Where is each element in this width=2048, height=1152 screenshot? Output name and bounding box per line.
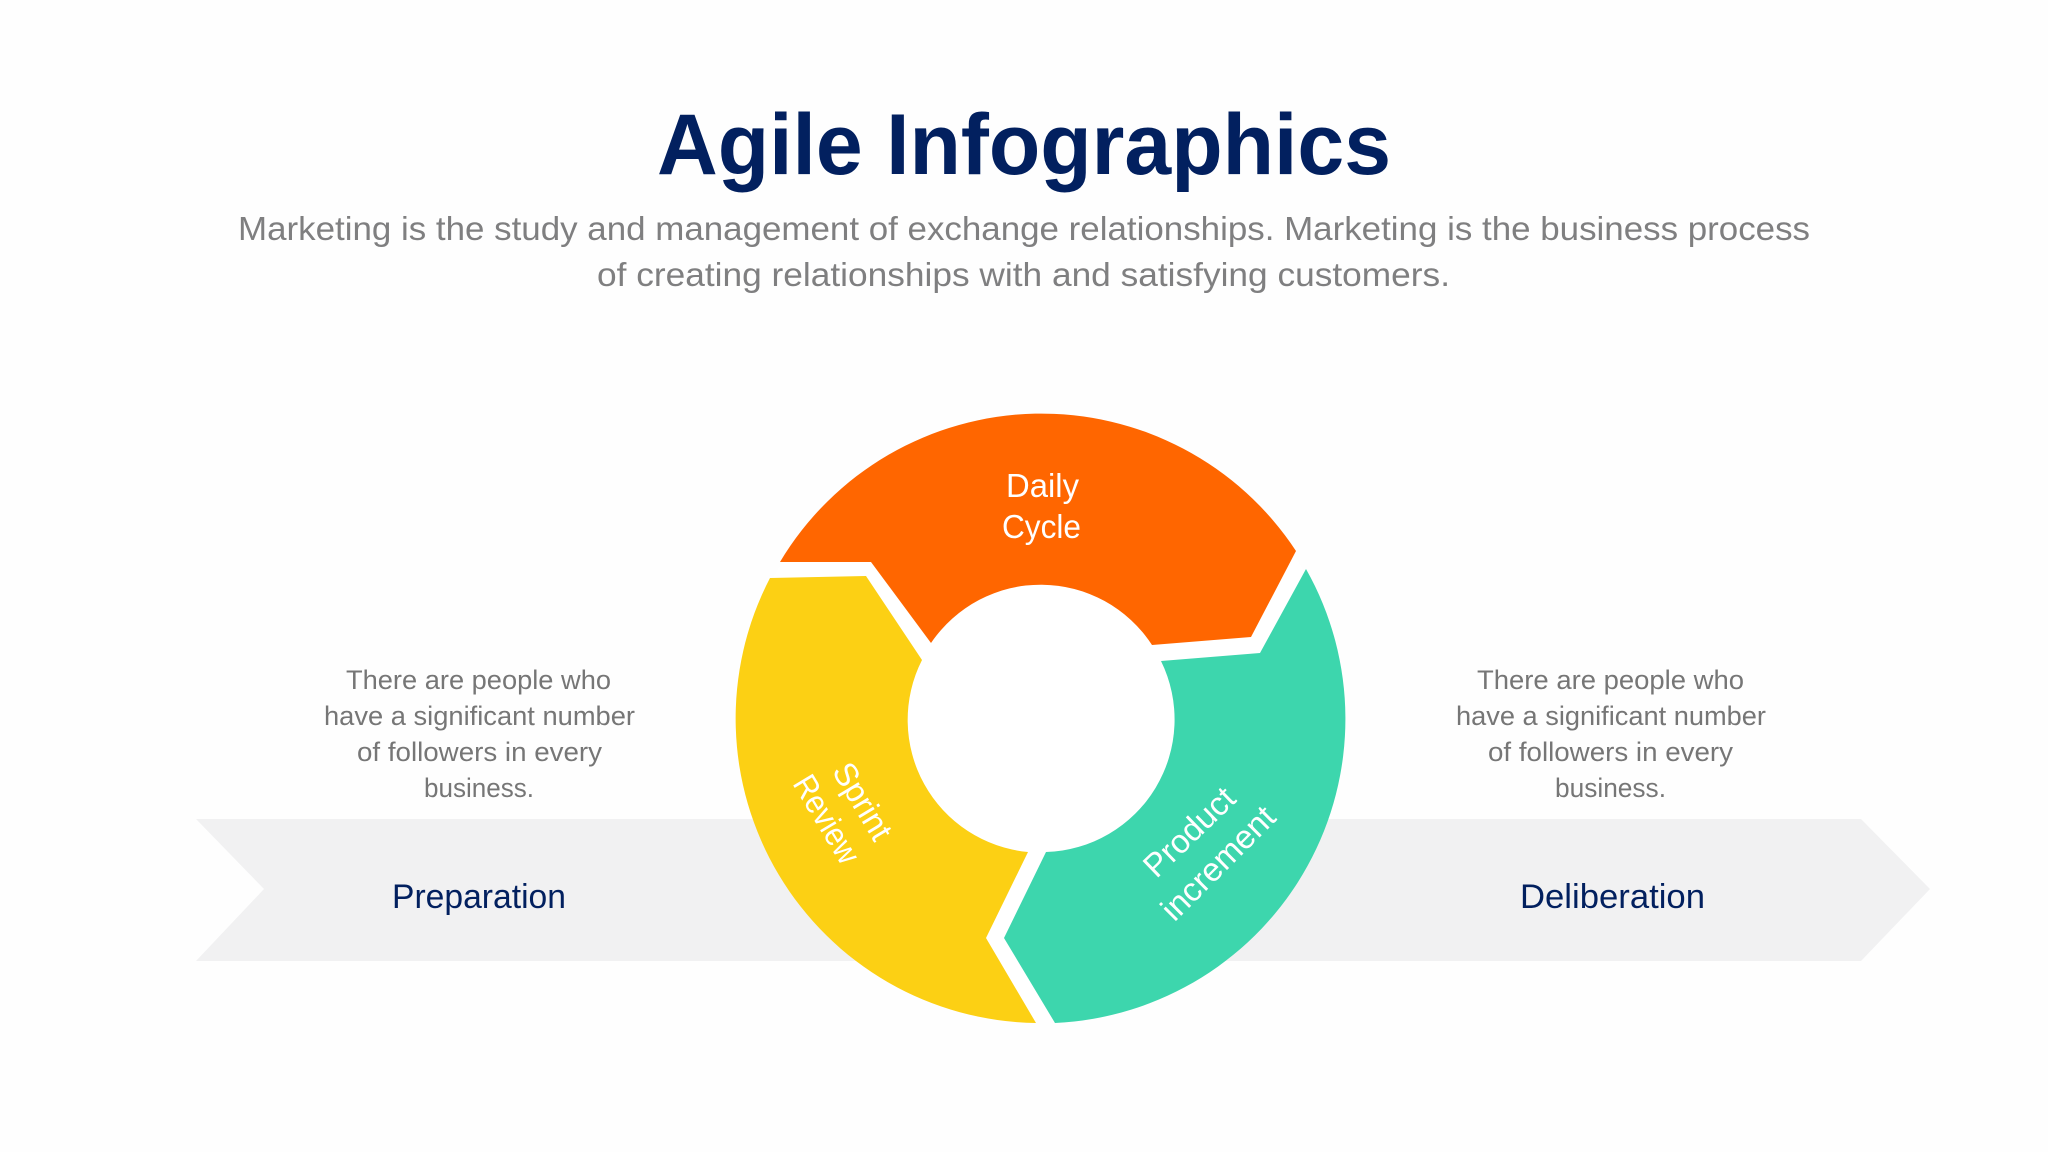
segment: daily cycle	[780, 414, 1296, 645]
title: Agile Infographics	[657, 97, 1391, 193]
left description text: of followers in every	[357, 737, 603, 767]
left description text: There are people who	[346, 665, 611, 695]
left description text: business.	[424, 773, 534, 803]
segment: sprint review	[736, 576, 1036, 1023]
label: deliberation: Deliberation	[1520, 878, 1705, 916]
subtitle text block: of creating relationships with and satisfying customers.	[597, 256, 1450, 293]
segment: daily cycle: Daily	[1006, 467, 1079, 504]
label: preparation: Preparation	[392, 878, 566, 916]
right description text: There are people who	[1477, 665, 1744, 695]
segment: sprint review: Sprint	[825, 756, 900, 847]
left description text: have a significant number	[324, 701, 635, 731]
cycle wheel	[736, 414, 1345, 1023]
ribbon arrow: preparation	[196, 819, 1040, 961]
segment: product increment	[1004, 569, 1345, 1023]
right description text	[1456, 665, 1766, 803]
ribbon arrow: deliberation	[1040, 819, 1930, 961]
subtitle text block: Marketing is the study and management of exchange relationships. Marketing is the business process	[238, 210, 1810, 247]
right description text: business.	[1555, 773, 1666, 803]
left description text	[324, 665, 635, 803]
segment: product increment: increment	[1153, 798, 1283, 928]
subtitle text block	[238, 210, 1810, 293]
right description text: have a significant number	[1456, 701, 1766, 731]
segment: daily cycle: Cycle	[1002, 508, 1081, 545]
segment: product increment: Product	[1136, 779, 1243, 884]
segment: sprint review: Review	[786, 768, 868, 870]
right description text: of followers in every	[1488, 737, 1734, 767]
